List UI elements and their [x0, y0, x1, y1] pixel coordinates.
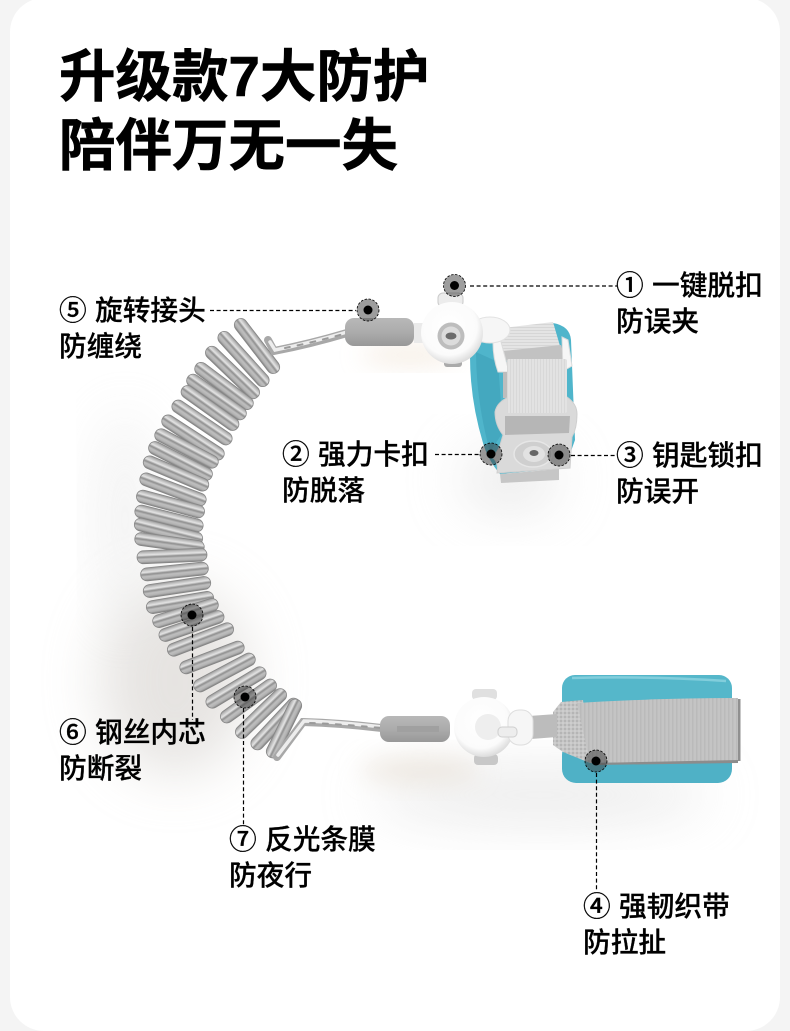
label 5: 旋转接头 — [95, 295, 206, 326]
label 4: 防拉扯 — [583, 927, 666, 958]
label 4: 强韧织带 — [619, 891, 730, 922]
label 6: 钢丝内芯 — [95, 717, 206, 748]
lower wire — [277, 721, 382, 757]
side hinge — [508, 710, 533, 745]
marker 5 — [357, 299, 379, 321]
marker 2 — [480, 443, 502, 465]
label 6: 防断裂 — [59, 753, 142, 784]
upper wrist strap — [470, 322, 577, 483]
teal band bottom — [562, 741, 732, 783]
top button — [472, 689, 497, 700]
title line 1: 升级款7大防护 — [59, 45, 429, 108]
soft shadows — [100, 347, 710, 820]
label 7 — [229, 824, 376, 891]
label 7: ⑦ — [229, 824, 257, 855]
label 1: 一键脱扣 — [652, 270, 763, 301]
gray cylinder — [380, 716, 450, 742]
label 1 — [616, 270, 763, 337]
buckle frame — [492, 397, 577, 473]
label 1: ① — [616, 270, 644, 301]
label 7: 防夜行 — [229, 860, 312, 891]
lower wrist strap — [529, 675, 740, 783]
gray strap — [577, 698, 740, 763]
teal band top — [562, 675, 732, 717]
lower connector — [380, 689, 533, 765]
teal padded band — [470, 323, 575, 474]
bottom button — [474, 754, 498, 765]
label 3: 钥匙锁扣 — [652, 440, 763, 471]
marker 7 — [234, 686, 256, 708]
label 3: ③ — [616, 440, 644, 471]
upper webbing — [495, 322, 560, 352]
marker 1 — [444, 274, 466, 296]
upper connector — [345, 293, 510, 367]
label 2: 防脱落 — [282, 475, 365, 506]
upper wire — [268, 332, 347, 351]
label 5 — [59, 295, 206, 362]
hinge arm — [470, 317, 510, 343]
label 2: 强力卡扣 — [318, 439, 429, 470]
front webbing — [507, 359, 567, 413]
webbing connector — [529, 714, 557, 739]
bottom shade — [444, 358, 462, 367]
label 3: 防误开 — [616, 476, 699, 507]
label 2 — [282, 439, 429, 506]
marker 3 — [548, 444, 570, 466]
label 7: 反光条膜 — [265, 824, 376, 855]
key lock ring — [514, 441, 552, 467]
buckle window — [505, 416, 570, 435]
label 3 — [616, 440, 763, 507]
label 5: 防缠绕 — [59, 331, 142, 362]
pin — [498, 727, 517, 737]
label 6: ⑥ — [59, 717, 87, 748]
label 4: ④ — [583, 891, 611, 922]
white loop buckle — [493, 338, 509, 372]
label 1: 防误夹 — [616, 306, 699, 337]
side webbing — [503, 372, 509, 398]
white ball — [421, 302, 483, 364]
marker 4 — [585, 750, 607, 772]
label 5: ⑤ — [59, 295, 87, 326]
bottom webbing — [500, 469, 559, 483]
coil cord — [133, 316, 304, 760]
label 6 — [59, 717, 206, 784]
label 2: ② — [282, 439, 310, 470]
label 4 — [583, 891, 730, 958]
title line 2: 陪伴万无一失 — [59, 114, 398, 177]
gray cylinder — [345, 318, 414, 346]
top button — [438, 293, 463, 307]
velcro tab — [553, 700, 590, 763]
white ring — [454, 697, 514, 757]
lock ring — [438, 322, 464, 350]
callout lines — [192, 286, 617, 890]
marker 6 — [181, 604, 203, 626]
